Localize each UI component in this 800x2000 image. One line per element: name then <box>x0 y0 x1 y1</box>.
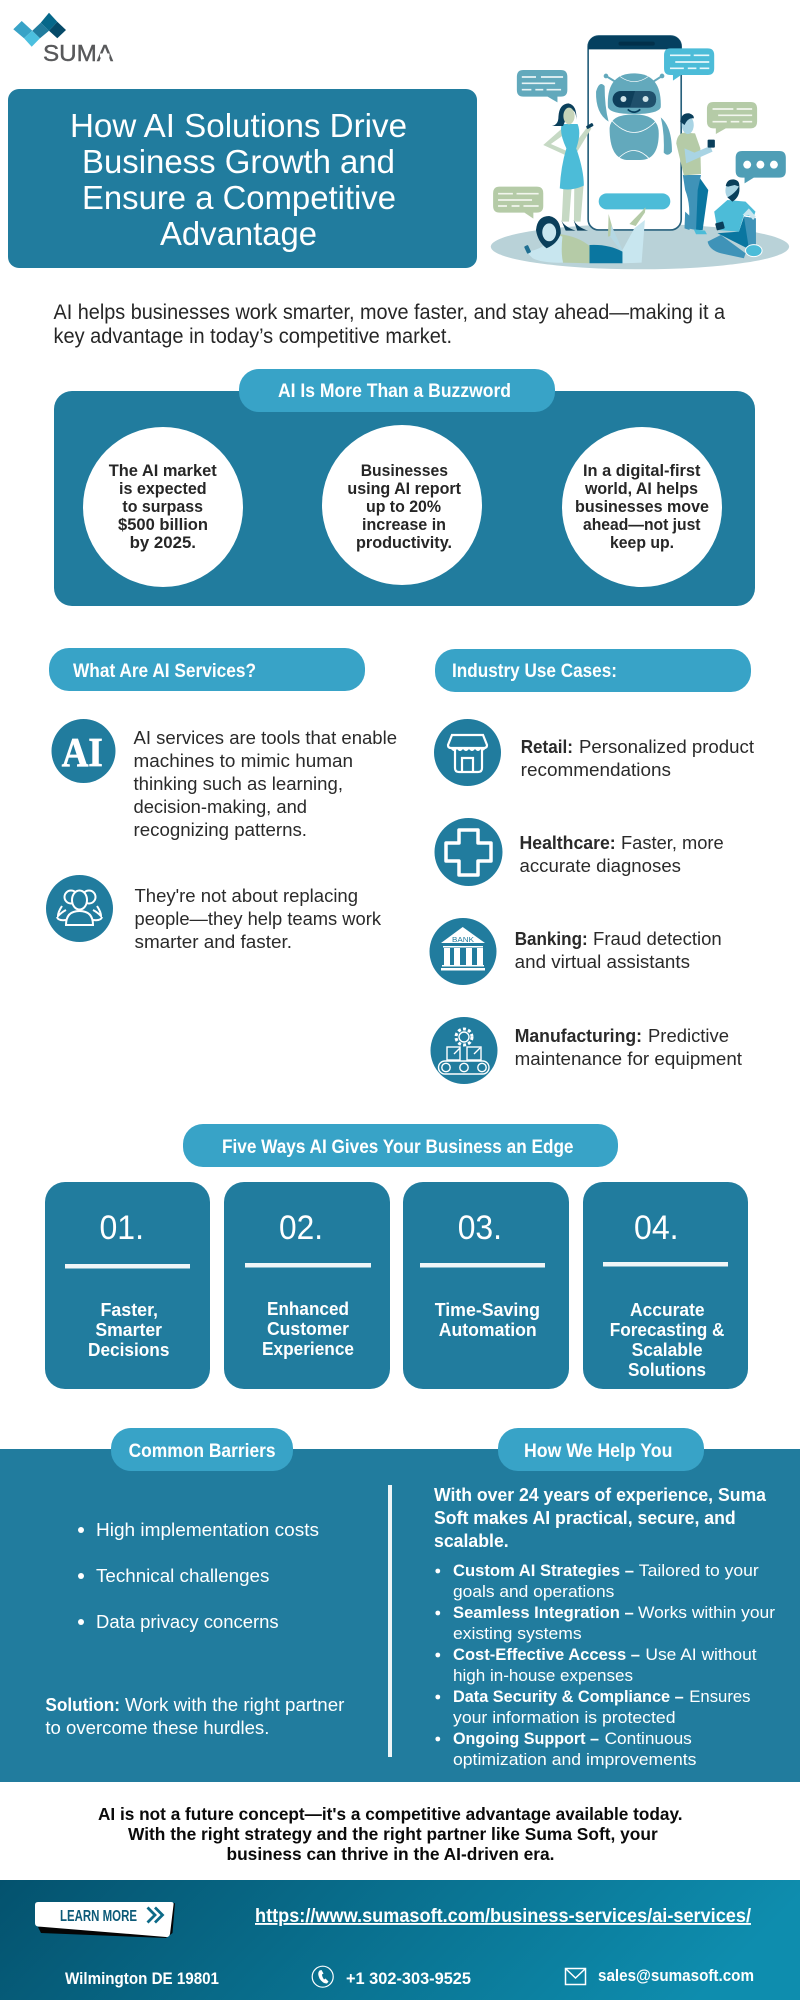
closing statement: business can thrive in the AI-driven era. <box>226 1844 554 1864</box>
illustration: people chatting with a robot on a phone <box>491 36 789 269</box>
text block: how we help intro: Soft makes AI practical, secure, and <box>434 1508 736 1528</box>
text block: not replacing people: They're not about replacing <box>134 886 358 906</box>
text block: banking <box>515 929 722 972</box>
list: how we help <box>435 1561 775 1769</box>
list: how we help: Custom AI Strategies – <box>453 1561 634 1580</box>
list: how we help: existing systems <box>453 1624 582 1643</box>
text block: definition of AI services: thinking such as learning, <box>134 774 343 794</box>
card: 03 time-saving automation: 03. <box>458 1209 502 1247</box>
heading pill: common barriers <box>111 1428 293 1471</box>
list: how we help: goals and operations <box>453 1582 614 1601</box>
icon: manufacturing conveyor <box>430 1017 498 1084</box>
text block: definition of AI services: decision-making, and <box>134 797 307 817</box>
panel: footer <box>0 1880 800 2000</box>
list: how we help: Use AI without <box>645 1645 757 1664</box>
text block: definition of AI services: AI services are tools that enable <box>134 728 397 748</box>
icon: AI badge <box>52 719 116 783</box>
icon: retail store <box>434 719 501 786</box>
card: 04 accurate forecasting and scalable solutions: Accurate <box>630 1300 705 1320</box>
heading pill: AI is more than a buzzword <box>239 369 555 412</box>
text block: how we help intro <box>434 1485 767 1551</box>
heading pill: what are AI services <box>49 648 365 691</box>
card: 04 accurate forecasting and scalable solutions: Scalable <box>632 1340 703 1360</box>
closing statement: With the right strategy and the right partner like Suma Soft, your <box>128 1824 658 1844</box>
list: how we help: Continuous <box>605 1729 692 1748</box>
card: 01 faster, smarter decisions: Faster, <box>100 1300 158 1320</box>
text block: solution: Work with the right partner <box>125 1695 344 1715</box>
title: Business Growth and <box>82 143 395 180</box>
stat circle: productivity: using AI report <box>347 479 461 498</box>
stat circle: productivity: increase in <box>362 515 446 534</box>
text block: not replacing people: smarter and faster. <box>134 932 292 952</box>
text block: retail: Retail: <box>521 737 573 757</box>
email address: sales@sumasoft.com <box>598 1967 754 1985</box>
address: Wilmington DE 19801 <box>65 1970 219 1988</box>
stat circle: AI market: $500 billion <box>118 515 208 534</box>
stat circle: digital first <box>562 427 722 587</box>
card: 01 faster, smarter decisions: Smarter <box>95 1320 162 1340</box>
card: 04 accurate forecasting and scalable solutions: Solutions <box>628 1360 706 1380</box>
stat circle: productivity: productivity. <box>356 533 452 552</box>
stat circle: digital first: In a digital-first <box>583 461 701 480</box>
card: 02 enhanced customer experience <box>224 1182 390 1389</box>
text block: healthcare <box>520 833 724 876</box>
text block: healthcare: Healthcare: <box>520 833 616 853</box>
title: Ensure a Competitive <box>82 179 396 216</box>
heading pill: five ways: Five Ways AI Gives Your Business an Edge <box>222 1136 574 1158</box>
card: 02 enhanced customer experience: Experience <box>262 1339 354 1359</box>
list: how we help: optimization and improvements <box>453 1750 696 1769</box>
list: common barriers: High implementation costs <box>96 1520 319 1540</box>
link: service URL: https://www.sumasoft.com/business-services/ai-services/ <box>255 1906 752 1927</box>
card: 02 enhanced customer experience: Enhanced <box>267 1299 349 1319</box>
text block: not replacing people <box>134 886 382 952</box>
icon: phone <box>312 1966 333 1987</box>
list: how we help: Works within your <box>638 1603 775 1622</box>
card: 04 accurate forecasting and scalable solutions: 04. <box>634 1209 679 1247</box>
stat circle: digital first: ahead—not just <box>583 515 701 534</box>
stat circle: productivity: up to 20% <box>366 497 441 516</box>
title: Advantage <box>160 215 317 252</box>
list: common barriers <box>78 1520 319 1632</box>
text block: how we help intro: scalable. <box>434 1531 509 1551</box>
logo: Suma: SUMA <box>43 40 114 66</box>
icon: AI badge: AI <box>62 729 103 775</box>
intro text: key advantage in today’s competitive market. <box>54 325 452 348</box>
title: How AI Solutions Drive <box>70 107 407 144</box>
card: 04 accurate forecasting and scalable solutions <box>583 1182 748 1389</box>
stat circle: productivity <box>322 425 482 585</box>
stat circle: digital first: businesses move <box>575 497 709 516</box>
card: 01 faster, smarter decisions <box>45 1182 210 1389</box>
button: learn more <box>35 1902 175 1938</box>
text block: retail: recommendations <box>521 760 671 780</box>
text block: banking: Fraud detection <box>593 929 722 949</box>
text block: manufacturing: Manufacturing: <box>515 1026 642 1046</box>
list: common barriers: Data privacy concerns <box>96 1612 279 1632</box>
heading pill: AI is more than a buzzword: AI Is More Than a Buzzword <box>278 380 511 402</box>
heading pill: how we help you <box>498 1428 704 1471</box>
text block: healthcare: accurate diagnoses <box>520 856 681 876</box>
text block: manufacturing <box>515 1026 742 1069</box>
stat circle: AI market: to surpass <box>122 497 203 516</box>
heading pill: industry use cases: Industry Use Cases: <box>452 660 617 682</box>
icon: bank <box>430 918 496 985</box>
icon: healthcare cross <box>434 818 502 886</box>
panel: title banner <box>8 89 477 268</box>
panel: AI is more than a buzzword <box>54 369 755 606</box>
text block: definition of AI services <box>134 728 397 840</box>
title <box>70 107 407 252</box>
icon: team of people <box>46 875 113 942</box>
stat circle: AI market: by 2025. <box>130 533 196 552</box>
list: how we help: your information is protected <box>453 1708 676 1727</box>
card: 02 enhanced customer experience: Customer <box>267 1319 349 1339</box>
icon: bank: BANK <box>452 935 474 944</box>
heading pill: what are AI services: What Are AI Services? <box>73 660 256 682</box>
text block: retail: Personalized product <box>579 737 754 757</box>
closing statement <box>98 1804 683 1864</box>
stat circle: digital first: world, AI helps <box>584 479 698 498</box>
list: how we help: Seamless Integration – <box>453 1603 634 1622</box>
card: 03 time-saving automation: Time-Saving <box>435 1300 540 1320</box>
list: how we help: Ensures <box>689 1687 750 1706</box>
stat circle: AI market: is expected <box>119 479 207 498</box>
phone number: +1 302-303-9525 <box>346 1970 471 1988</box>
stat circle: productivity: Businesses <box>361 461 448 480</box>
intro text <box>54 301 725 348</box>
text block: how we help intro: With over 24 years of experience, Suma <box>434 1485 767 1505</box>
list: how we help: Cost-Effective Access – <box>453 1645 640 1664</box>
stat circle: AI market: The AI market <box>109 461 217 480</box>
card: 01 faster, smarter decisions: 01. <box>100 1209 144 1247</box>
stat circle: AI market <box>83 427 243 587</box>
card: 03 time-saving automation <box>403 1182 569 1389</box>
list: how we help: Data Security & Compliance – <box>453 1687 684 1706</box>
stat circle: digital first: keep up. <box>610 533 674 552</box>
card: 03 time-saving automation: Automation <box>439 1320 537 1340</box>
text block: definition of AI services: machines to mimic human <box>134 751 353 771</box>
closing statement: AI is not a future concept—it's a competitive advantage available today. <box>98 1804 683 1824</box>
card: 04 accurate forecasting and scalable solutions: Forecasting & <box>610 1320 724 1340</box>
text block: healthcare: Faster, more <box>621 833 724 853</box>
text block: manufacturing: maintenance for equipment <box>515 1049 742 1069</box>
heading pill: how we help you: How We Help You <box>524 1440 672 1462</box>
heading pill: common barriers: Common Barriers <box>129 1440 276 1462</box>
list: common barriers: Technical challenges <box>96 1566 269 1586</box>
text block: banking: Banking: <box>515 929 588 949</box>
heading pill: five ways <box>183 1124 618 1167</box>
card: 01 faster, smarter decisions: Decisions <box>88 1340 169 1360</box>
list: how we help: Ongoing Support – <box>453 1729 599 1748</box>
icon: mail <box>566 1968 586 1984</box>
panel: barriers and how we help band <box>0 1428 800 1782</box>
button: learn more: LEARN MORE <box>60 1908 137 1925</box>
text block: solution <box>45 1695 344 1738</box>
text block: definition of AI services: recognizing patterns. <box>134 820 307 840</box>
card: 02 enhanced customer experience: 02. <box>279 1209 323 1247</box>
text block: banking: and virtual assistants <box>515 952 690 972</box>
text block: retail <box>521 737 754 780</box>
text block: solution: to overcome these hurdles. <box>45 1718 269 1738</box>
text block: manufacturing: Predictive <box>648 1026 729 1046</box>
text block: not replacing people: people—they help teams work <box>134 909 382 929</box>
list: how we help: high in-house expenses <box>453 1666 633 1685</box>
heading pill: industry use cases <box>435 649 751 692</box>
intro text: AI helps businesses work smarter, move faster, and stay ahead—making it a <box>54 301 725 324</box>
list: how we help: Tailored to your <box>639 1561 759 1580</box>
text block: solution: Solution: <box>45 1695 120 1715</box>
logo: Suma <box>13 13 114 66</box>
